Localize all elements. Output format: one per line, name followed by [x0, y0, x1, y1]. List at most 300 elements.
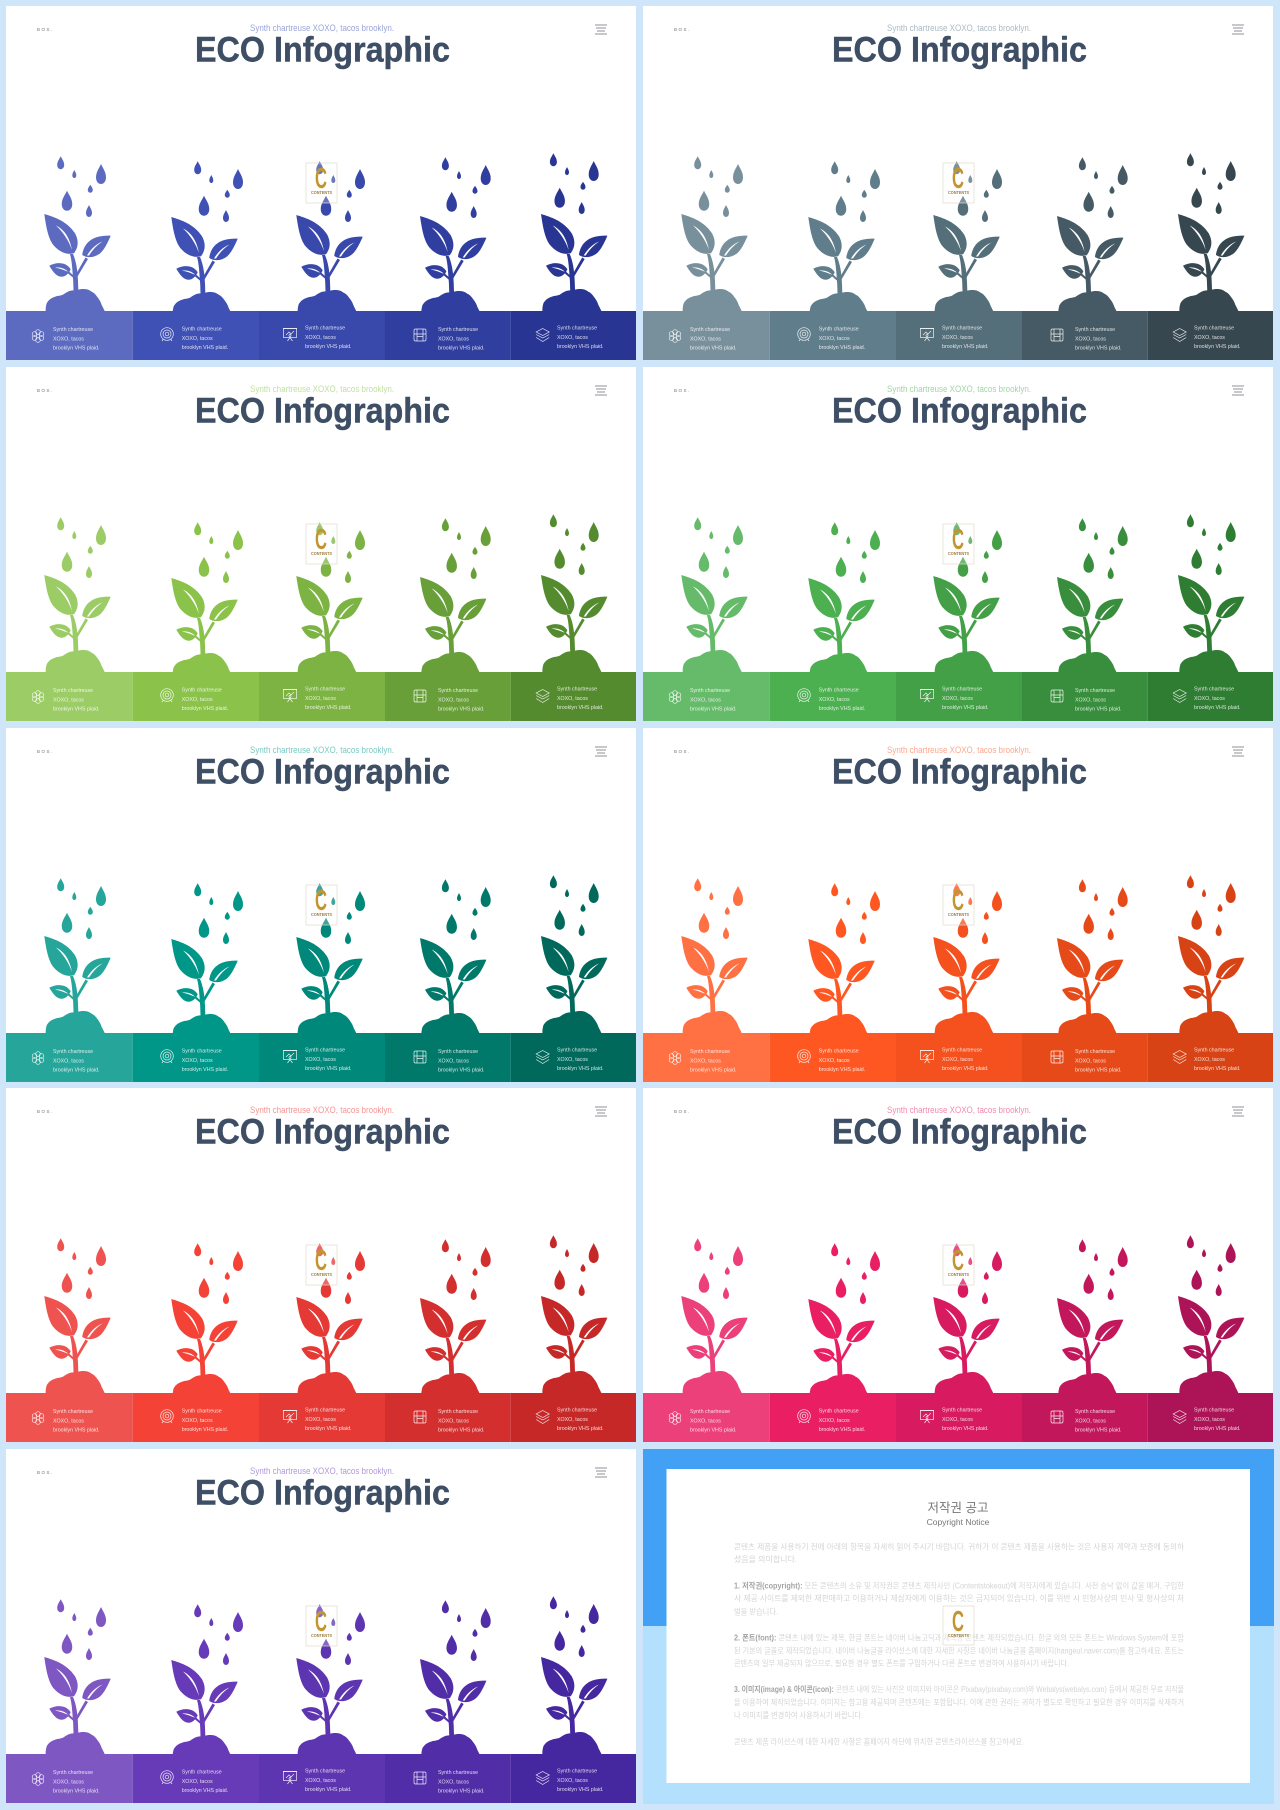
band segment 5: brooklyn VHS plaid.: [1194, 705, 1241, 711]
band segment 5: Synth chartreuse: [557, 1769, 597, 1775]
plant 5: [1178, 514, 1244, 675]
band segment 3: Synth chartreuse: [942, 1048, 982, 1054]
plant 5: [541, 875, 607, 1036]
plant 4: [420, 518, 491, 677]
band segment 2: brooklyn VHS plaid.: [819, 345, 865, 351]
band segment 5: [511, 311, 636, 360]
slide: blue grey: [643, 6, 1273, 360]
plant 4: [420, 1600, 491, 1759]
band segment 3: Synth chartreuse: [942, 686, 982, 692]
title: ECO Infographic: [195, 1112, 450, 1152]
band segment 1: brooklyn VHS plaid.: [53, 1788, 100, 1794]
band segment 1: brooklyn VHS plaid.: [690, 1428, 737, 1434]
band segment 3: [896, 311, 1022, 360]
band segment 2: [770, 1033, 896, 1082]
band segment 5: Synth chartreuse: [557, 326, 597, 332]
band segment 4: Synth chartreuse: [438, 1770, 478, 1776]
notice background upper: [643, 1449, 1274, 1626]
notice section 1: [734, 1580, 1185, 1616]
menu icon: [595, 1107, 607, 1116]
band segment 3: brooklyn VHS plaid.: [305, 1426, 352, 1432]
notice section 1: 1. 저작권(copyright): 모든 콘텐츠의 소유 및 저작권은 콘텐츠 제작사인 (Contentstokeout)에 저작자에게 있습니다. 사전 승낙 없이 값을 매겨, 구입한: [734, 1580, 1185, 1590]
plant 5: [541, 514, 607, 675]
notice section 1: 벌을 받습니다.: [734, 1606, 778, 1616]
title: ECO Infographic: [832, 752, 1087, 792]
band segment 1: XOXO, tacos: [53, 1418, 84, 1424]
plant 4: [420, 879, 491, 1038]
band segment 1: XOXO, tacos: [53, 1779, 84, 1785]
slide: red: [6, 1088, 636, 1442]
notice section 2: [734, 1632, 1185, 1668]
title: ECO Infographic: [195, 30, 450, 70]
slide background: [6, 1088, 636, 1442]
notice watermark: CONTENTS: [948, 1633, 969, 1638]
band segment 1: [6, 311, 133, 360]
band segment 4: [1022, 1033, 1148, 1082]
band segment 4: Synth chartreuse: [438, 327, 478, 333]
title: ECO Infographic: [832, 392, 1087, 430]
plant 5: [1178, 153, 1244, 314]
band segment 4: Synth chartreuse: [1075, 327, 1115, 333]
title: ECO Infographic: [195, 1474, 450, 1512]
band segment 5: XOXO, tacos: [557, 335, 588, 341]
band segment 1: [6, 1393, 133, 1442]
title: ECO Infographic: [195, 752, 450, 792]
plant 2: [808, 522, 880, 678]
notice section 3: 3. 이미지(image) & 아이콘(icon): 콘텐츠 내에 있는 사진은 이미지와 아이콘은 Pixabay(pixabay.com)와 Webalys(webalys.com) 등에서 제공한 무료 저작물: [734, 1684, 1184, 1694]
band segment 5: XOXO, tacos: [1194, 1057, 1225, 1063]
plant 3: [933, 522, 1002, 676]
plant 4: [1057, 157, 1128, 316]
band segment 4: brooklyn VHS plaid.: [438, 706, 485, 712]
band segment 1: brooklyn VHS plaid.: [53, 1068, 100, 1074]
slide background: [6, 6, 636, 360]
plant 2: [171, 522, 243, 678]
slide background: [643, 367, 1273, 721]
band segment 3: brooklyn VHS plaid.: [942, 705, 989, 711]
band segment 2: Synth chartreuse: [182, 1408, 222, 1414]
band segment 3: Synth chartreuse: [305, 686, 345, 692]
band segment 5: XOXO, tacos: [1194, 1417, 1225, 1423]
band segment 3: XOXO, tacos: [942, 335, 973, 341]
band segment 1: [643, 1033, 770, 1082]
subtitle: Synth chartreuse XOXO, tacos brooklyn.: [887, 384, 1031, 394]
band segment 2: XOXO, tacos: [182, 336, 213, 342]
notice card: [666, 1469, 1250, 1783]
band segment 2: Synth chartreuse: [819, 326, 859, 332]
watermark: [943, 885, 974, 925]
band segment 2: XOXO, tacos: [819, 1058, 850, 1064]
band segment 3: XOXO, tacos: [305, 696, 336, 702]
subtitle: Synth chartreuse XOXO, tacos brooklyn.: [250, 1466, 394, 1476]
band segment 4: XOXO, tacos: [1075, 1058, 1106, 1064]
plant 2: [171, 1243, 243, 1399]
notice section 3: [734, 1684, 1184, 1720]
notice intro: 셨음을 의미합니다.: [734, 1554, 797, 1564]
notice section 1: 사 제공 사이트를 제외한 재판매하고 이용하거나 제삼자에게 이용하는 것은 금지되어 있습니다. 이를 위반 시 민형사상의 민사 및 형사상의 처: [734, 1593, 1184, 1603]
panel: copyright notice: [643, 1449, 1274, 1804]
band segment 4: brooklyn VHS plaid.: [1075, 1068, 1122, 1074]
band segment 4: [1022, 311, 1148, 360]
band segment 5: Synth chartreuse: [557, 1048, 597, 1054]
notice intro: 콘텐츠 제품을 사용하기 전에 아래의 항목을 자세히 읽어 주시기 바랍니다. 귀하가 이 콘텐츠 제품을 사용하는 것은 사용자 계약과 보증에 동의하: [734, 1542, 1185, 1552]
plant 1: [44, 1599, 111, 1757]
slide: indigo: [6, 6, 636, 360]
menu icon: [1232, 386, 1244, 395]
band segment 3: [259, 1393, 385, 1442]
band segment 3: XOXO, tacos: [305, 1057, 336, 1063]
band segment 2: Synth chartreuse: [819, 688, 859, 694]
title: ECO Infographic: [832, 1112, 1087, 1152]
band segment 2: XOXO, tacos: [182, 1058, 213, 1064]
band segment 3: brooklyn VHS plaid.: [942, 1066, 989, 1072]
plant 3: [933, 1243, 1002, 1397]
band segment 3: XOXO, tacos: [305, 1778, 336, 1784]
slide: deep purple: [6, 1449, 636, 1803]
band segment 5: brooklyn VHS plaid.: [557, 344, 604, 350]
notice subheading: Copyright Notice: [927, 1517, 990, 1527]
band segment 4: XOXO, tacos: [1075, 336, 1106, 342]
band segment 4: XOXO, tacos: [438, 1058, 469, 1064]
plant 2: [808, 1243, 880, 1399]
notice watermark: C: [952, 1606, 964, 1638]
band segment 2: Synth chartreuse: [819, 1408, 859, 1414]
menu icon: [595, 25, 607, 34]
band segment 1: Synth chartreuse: [690, 688, 730, 694]
band segment 2: Synth chartreuse: [182, 326, 222, 332]
band segment 1: XOXO, tacos: [53, 1058, 84, 1064]
plant 1: [44, 156, 111, 314]
notice intro: [734, 1542, 1185, 1564]
brand tag: BOS.: [37, 388, 54, 393]
band segment 2: [770, 672, 896, 721]
band segment 1: Synth chartreuse: [690, 327, 730, 333]
plant 5: [541, 1235, 607, 1396]
slide: light green: [6, 367, 636, 721]
band segment 4: [385, 1393, 511, 1442]
band segment 3: brooklyn VHS plaid.: [305, 705, 352, 711]
band segment 4: Synth chartreuse: [438, 1409, 478, 1415]
band segment 4: brooklyn VHS plaid.: [438, 1068, 485, 1074]
plant 1: [681, 156, 748, 314]
band segment 5: XOXO, tacos: [557, 696, 588, 702]
band segment 5: XOXO, tacos: [557, 1057, 588, 1063]
notice heading: 저작권 공고: [928, 1501, 988, 1515]
band segment 4: brooklyn VHS plaid.: [1075, 706, 1122, 712]
band segment 1: Synth chartreuse: [53, 1409, 93, 1415]
band segment 1: Synth chartreuse: [53, 327, 93, 333]
band segment 1: XOXO, tacos: [690, 336, 721, 342]
notice section 3: 을 이용하여 제작되었습니다. 이미지는 참고용 제공되며 콘텐츠에는 포함됩니다. 이에 관한 권리는 귀하가 별도로 확인하고 필요한 경우 이미지를 삭제하거: [734, 1697, 1184, 1707]
watermark: [306, 885, 337, 925]
plant 2: [171, 161, 243, 317]
band segment 2: XOXO, tacos: [819, 697, 850, 703]
subtitle: Synth chartreuse XOXO, tacos brooklyn.: [250, 384, 394, 394]
band segment 3: [259, 311, 385, 360]
band segment 4: XOXO, tacos: [438, 1418, 469, 1424]
band segment 2: brooklyn VHS plaid.: [819, 706, 865, 712]
menu icon: [1232, 25, 1244, 34]
band segment 5: brooklyn VHS plaid.: [1194, 344, 1241, 350]
band segment 4: [1022, 672, 1148, 721]
band segment 2: brooklyn VHS plaid.: [819, 1427, 865, 1433]
band segment 2: [133, 1033, 259, 1082]
band segment 2: [133, 1754, 259, 1803]
brand tag: BOS.: [674, 27, 691, 32]
band segment 5: [1148, 672, 1273, 721]
band segment 2: Synth chartreuse: [182, 688, 222, 694]
band segment 2: [770, 1393, 896, 1442]
band segment 3: brooklyn VHS plaid.: [305, 1787, 352, 1793]
plant 5: [541, 1596, 607, 1757]
band segment 1: brooklyn VHS plaid.: [53, 346, 100, 352]
band segment 5: XOXO, tacos: [1194, 335, 1225, 341]
plant 1: [681, 878, 748, 1036]
notice footer: 콘텐츠 제품 라이선스에 대한 자세한 사항은 홈페이지 하단에 위치한 콘텐츠라이선스를 참고하세요.: [734, 1736, 1024, 1746]
band segment 2: brooklyn VHS plaid.: [182, 1427, 228, 1433]
band segment 5: [511, 1393, 636, 1442]
band segment 4: Synth chartreuse: [438, 688, 478, 694]
plant 5: [1178, 1235, 1244, 1396]
plant 2: [171, 1604, 243, 1760]
band segment 3: Synth chartreuse: [305, 1048, 345, 1054]
band segment 5: Synth chartreuse: [1194, 1408, 1234, 1414]
band segment 4: [385, 672, 511, 721]
band segment 3: [259, 1754, 385, 1803]
band segment 2: [133, 1393, 259, 1442]
plant 4: [1057, 1239, 1128, 1398]
band segment 1: brooklyn VHS plaid.: [690, 1068, 737, 1074]
band segment 4: brooklyn VHS plaid.: [1075, 1428, 1122, 1434]
brand tag: BOS.: [674, 388, 691, 393]
plant 1: [44, 1238, 111, 1396]
band segment 5: brooklyn VHS plaid.: [557, 1066, 604, 1072]
band segment 2: brooklyn VHS plaid.: [182, 706, 228, 712]
plant 2: [808, 161, 880, 317]
band segment 4: XOXO, tacos: [438, 1779, 469, 1785]
brand tag: BOS.: [37, 749, 54, 754]
band segment 5: brooklyn VHS plaid.: [557, 1787, 604, 1793]
band segment 2: brooklyn VHS plaid.: [819, 1067, 865, 1073]
menu icon: [1232, 1107, 1244, 1116]
band segment 3: brooklyn VHS plaid.: [942, 1426, 989, 1432]
band segment 4: [1022, 1393, 1148, 1442]
slide background: [6, 367, 636, 721]
band segment 3: brooklyn VHS plaid.: [942, 344, 989, 350]
band segment 3: XOXO, tacos: [305, 1417, 336, 1423]
band segment 3: brooklyn VHS plaid.: [305, 344, 352, 350]
brand tag: BOS.: [37, 1470, 54, 1475]
plant 3: [933, 883, 1002, 1037]
menu icon: [1232, 747, 1244, 756]
menu icon: [595, 1468, 607, 1477]
plant 3: [296, 1243, 365, 1397]
band segment 5: [511, 1033, 636, 1082]
band segment 4: XOXO, tacos: [1075, 1418, 1106, 1424]
band segment 5: [511, 672, 636, 721]
band segment 4: [385, 1754, 511, 1803]
menu icon: [595, 747, 607, 756]
plant 3: [296, 522, 365, 676]
band segment 5: Synth chartreuse: [557, 1408, 597, 1414]
band segment 4: XOXO, tacos: [1075, 697, 1106, 703]
band segment 1: brooklyn VHS plaid.: [53, 1428, 100, 1434]
band segment 1: [6, 1033, 133, 1082]
subtitle: Synth chartreuse XOXO, tacos brooklyn.: [887, 745, 1031, 755]
slide: green: [643, 367, 1273, 721]
plant 1: [681, 1238, 748, 1396]
brand tag: BOS.: [37, 27, 54, 32]
notice section 2: 콘텐츠의 일부 제공되지 않으므로, 필요한 경우 별도 폰트를 구입하거나 다른 폰트로 변경하여 사용하시기 바랍니다.: [734, 1658, 1069, 1668]
title: ECO Infographic: [195, 392, 450, 430]
band segment 4: XOXO, tacos: [438, 336, 469, 342]
subtitle: Synth chartreuse XOXO, tacos brooklyn.: [250, 23, 394, 33]
brand tag: BOS.: [674, 1109, 691, 1114]
band segment 5: XOXO, tacos: [557, 1778, 588, 1784]
band segment 1: XOXO, tacos: [690, 697, 721, 703]
band segment 5: brooklyn VHS plaid.: [557, 1426, 604, 1432]
band segment 5: Synth chartreuse: [1194, 687, 1234, 693]
band segment 3: Synth chartreuse: [305, 1408, 345, 1414]
band segment 1: XOXO, tacos: [690, 1418, 721, 1424]
band segment 1: Synth chartreuse: [690, 1049, 730, 1055]
brand tag: BOS.: [674, 749, 691, 754]
band segment 3: [896, 672, 1022, 721]
band segment 1: XOXO, tacos: [690, 1058, 721, 1064]
band segment 2: XOXO, tacos: [819, 1418, 850, 1424]
subtitle: Synth chartreuse XOXO, tacos brooklyn.: [887, 23, 1031, 33]
notice section 2: 2. 폰트(font): 콘텐츠 내에 있는 제목, 한글 폰트는 네이버 나눔고딕과 제목용 콘텐츠 제작되었습니다. 한글 외의 모든 폰트는 Windows System에 포함: [734, 1632, 1185, 1642]
band segment 1: brooklyn VHS plaid.: [690, 346, 737, 352]
plant 3: [296, 883, 365, 1037]
band segment 3: XOXO, tacos: [942, 1417, 973, 1423]
band segment 2: Synth chartreuse: [182, 1048, 222, 1054]
band segment 3: Synth chartreuse: [942, 1408, 982, 1414]
watermark: [306, 1245, 337, 1285]
band segment 4: Synth chartreuse: [1075, 1409, 1115, 1415]
band segment 1: Synth chartreuse: [690, 1409, 730, 1415]
band segment 4: brooklyn VHS plaid.: [1075, 346, 1122, 352]
band segment 1: brooklyn VHS plaid.: [690, 706, 737, 712]
band segment 4: XOXO, tacos: [438, 697, 469, 703]
plant 2: [171, 883, 243, 1039]
plant 3: [296, 161, 365, 315]
band segment 5: [1148, 311, 1273, 360]
plant 3: [933, 161, 1002, 315]
plant 1: [44, 878, 111, 1036]
band segment 3: [896, 1033, 1022, 1082]
band segment 1: XOXO, tacos: [53, 697, 84, 703]
band segment 1: brooklyn VHS plaid.: [53, 706, 100, 712]
band segment 2: Synth chartreuse: [819, 1048, 859, 1054]
slide background: [643, 6, 1273, 360]
band segment 1: [643, 1393, 770, 1442]
band segment 2: brooklyn VHS plaid.: [182, 345, 228, 351]
watermark: [306, 524, 337, 564]
band segment 3: XOXO, tacos: [942, 1057, 973, 1063]
band segment 2: [133, 672, 259, 721]
brand tag: BOS.: [37, 1109, 54, 1114]
notice section 3: 나 이미지를 변경하여 사용하시기 바랍니다.: [734, 1710, 863, 1720]
band segment 1: [6, 1754, 133, 1803]
notice background lower: [643, 1626, 1274, 1804]
band segment 3: [896, 1393, 1022, 1442]
plant 3: [296, 1604, 365, 1758]
plant 1: [44, 517, 111, 675]
band segment 5: [1148, 1393, 1273, 1442]
band segment 4: Synth chartreuse: [1075, 1049, 1115, 1055]
band segment 5: Synth chartreuse: [1194, 326, 1234, 332]
band segment 4: [385, 311, 511, 360]
band segment 3: Synth chartreuse: [942, 326, 982, 332]
slide background: [643, 728, 1273, 1082]
band segment 5: brooklyn VHS plaid.: [557, 705, 604, 711]
band segment 4: brooklyn VHS plaid.: [438, 1788, 485, 1794]
band segment 5: XOXO, tacos: [557, 1417, 588, 1423]
slide: teal: [6, 728, 636, 1082]
band segment 5: brooklyn VHS plaid.: [1194, 1066, 1241, 1072]
title: ECO Infographic: [832, 30, 1087, 70]
band segment 4: [385, 1033, 511, 1082]
band segment 3: [259, 1033, 385, 1082]
slide background: [6, 728, 636, 1082]
band segment 5: [1148, 1033, 1273, 1082]
band segment 2: [770, 311, 896, 360]
band segment 1: Synth chartreuse: [53, 1049, 93, 1055]
band segment 2: XOXO, tacos: [182, 1779, 213, 1785]
band segment 4: brooklyn VHS plaid.: [438, 1428, 485, 1434]
band segment 4: brooklyn VHS plaid.: [438, 346, 485, 352]
band segment 1: [6, 672, 133, 721]
plant 4: [1057, 518, 1128, 677]
subtitle: Synth chartreuse XOXO, tacos brooklyn.: [250, 1105, 394, 1115]
band segment 1: Synth chartreuse: [53, 688, 93, 694]
plant 2: [808, 883, 880, 1039]
band segment 5: XOXO, tacos: [1194, 696, 1225, 702]
subtitle: Synth chartreuse XOXO, tacos brooklyn.: [250, 745, 394, 755]
notice section 2: 된 기본의 글꼴로 제작되었습니다. 네이버 나눔글꼴 라이선스에 대한 자세한 사항은 네이버 나눔글꼴 홈페이지(hangeul.naver.com)를 참고하세요. 폰트는: [734, 1646, 1184, 1656]
notice watermark: [943, 1606, 974, 1645]
band segment 3: XOXO, tacos: [305, 335, 336, 341]
band segment 3: [259, 672, 385, 721]
band segment 3: Synth chartreuse: [305, 326, 345, 332]
subtitle: Synth chartreuse XOXO, tacos brooklyn.: [887, 1105, 1031, 1115]
watermark: [943, 524, 974, 564]
watermark: [943, 1245, 974, 1285]
slide background: [643, 1088, 1273, 1442]
menu icon: [595, 386, 607, 395]
band segment 2: brooklyn VHS plaid.: [182, 1067, 228, 1073]
band segment 5: Synth chartreuse: [1194, 1048, 1234, 1054]
band segment 3: XOXO, tacos: [942, 696, 973, 702]
band segment 5: [511, 1754, 636, 1803]
plant 5: [1178, 875, 1244, 1036]
watermark: [943, 163, 974, 203]
band segment 3: brooklyn VHS plaid.: [305, 1066, 352, 1072]
band segment 5: Synth chartreuse: [557, 687, 597, 693]
band segment 1: XOXO, tacos: [53, 336, 84, 342]
band segment 2: XOXO, tacos: [182, 1418, 213, 1424]
band segment 3: Synth chartreuse: [305, 1768, 345, 1774]
slide: deep orange: [643, 728, 1273, 1082]
plant 4: [420, 1239, 491, 1398]
band segment 2: XOXO, tacos: [182, 697, 213, 703]
band segment 4: Synth chartreuse: [438, 1049, 478, 1055]
plant 4: [1057, 879, 1128, 1038]
band segment 2: Synth chartreuse: [182, 1770, 222, 1776]
plant 4: [420, 157, 491, 316]
band segment 2: XOXO, tacos: [819, 336, 850, 342]
